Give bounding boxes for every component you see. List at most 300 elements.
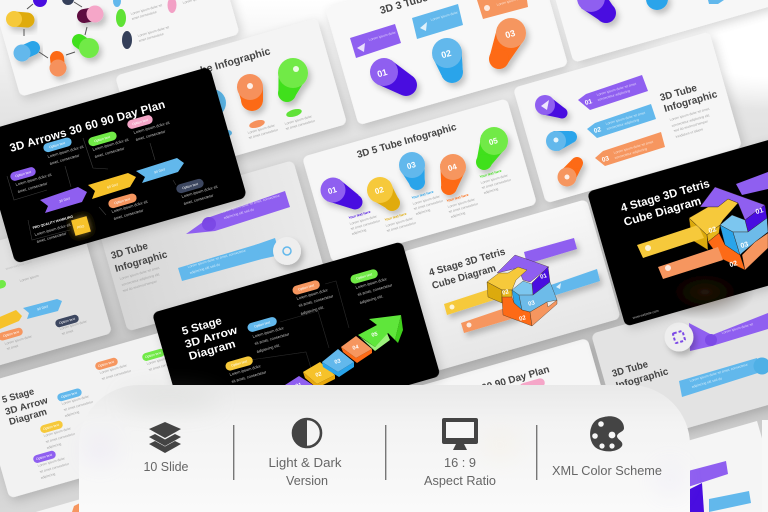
arrow: 90 day	[136, 158, 184, 183]
heading: 3D Tube	[110, 241, 150, 262]
tetris cube front	[689, 199, 768, 270]
tube: orange	[558, 157, 583, 186]
arrow: 60 day: 60 DAY	[107, 182, 119, 190]
captions: adipiscing	[483, 187, 499, 195]
slide text lines: Lorem ipsum dolor	[252, 325, 285, 339]
heading: 3D Tube	[611, 359, 650, 380]
pill text: amet, consectetur	[183, 192, 215, 206]
captions: Your text here	[384, 212, 407, 222]
banner 02: 02	[593, 126, 602, 135]
arrow 05	[358, 315, 403, 351]
tube: orange	[50, 58, 66, 76]
small icon: blue	[113, 0, 121, 7]
banner: purple: adipiscing elit sed do	[223, 207, 255, 220]
arrow: 30 day: 30 DAY	[59, 196, 71, 204]
bar: purple	[688, 461, 728, 487]
heading: 3D Arrow	[184, 324, 239, 351]
heading: 4 Stage 3D Tetris	[620, 178, 711, 215]
slide: bottom right cube fragment	[565, 421, 768, 512]
pill text: Lorem ipsum dolor sit	[133, 120, 171, 135]
captions: Your text here	[479, 169, 502, 179]
slide text lines: Lorem ipsum dolor	[247, 123, 276, 135]
small icon: pink	[168, 0, 176, 13]
connector lines	[250, 281, 349, 378]
pill text: Lorem ipsum dolor sit	[111, 199, 149, 214]
captions: Lorem ipsum dolor	[385, 216, 414, 228]
pill text: Lorem ipsum dolor sit	[92, 137, 130, 152]
banner: blue fragment	[708, 0, 724, 4]
slide text lines	[130, 0, 211, 43]
cube labels: 02	[502, 289, 510, 297]
slide text lines: amet consectetur	[131, 10, 158, 21]
pill text: amet, consectetur	[135, 128, 167, 142]
slide: cycle tubes	[0, 0, 240, 97]
slide text lines: adipiscing	[46, 442, 62, 450]
connector lines	[7, 138, 176, 240]
slide: 30 60 90 day plan light	[395, 338, 615, 489]
banner 02: Lorem ipsum dolor sit amet	[605, 111, 646, 126]
cube labels: 03	[740, 241, 749, 250]
slide text lines: adipiscing elit.	[359, 293, 384, 305]
pill: green	[349, 268, 379, 285]
heading: Cube Diagram	[623, 195, 703, 229]
arrow block 04: 04	[352, 344, 360, 352]
tube: yellow	[6, 11, 27, 27]
tube: blue	[198, 89, 226, 117]
glowing cube: PRO	[77, 224, 85, 230]
pill: orange: Option text	[3, 330, 19, 338]
bar: purple	[736, 172, 768, 195]
heading: Infographic	[114, 249, 169, 275]
banner 03	[595, 132, 665, 166]
slide text lines: Lorem ipsum dolor	[355, 276, 388, 290]
slide text lines: adipiscing elit.	[256, 342, 281, 354]
tube 03	[489, 18, 526, 69]
feature panel	[79, 385, 690, 512]
tube: dark	[62, 0, 74, 5]
bar: purple	[524, 238, 577, 264]
callout box: PRO QUALITY HANDLING	[32, 214, 74, 230]
pill: pink	[518, 377, 546, 393]
slide text lines: Lorem ipsum dolor sit	[137, 25, 169, 38]
banner 02	[587, 104, 656, 138]
pill: slate	[175, 178, 205, 194]
icon: layers	[149, 422, 181, 453]
pill: purple	[32, 450, 57, 464]
pill: orange: Option text	[298, 283, 315, 292]
pill: yellow: Option text	[231, 359, 248, 368]
tube 01	[370, 58, 417, 96]
tube: blue	[14, 44, 33, 62]
feature: aspect ratio	[424, 418, 496, 488]
bar: yellow	[637, 225, 704, 258]
slide text lines: Lorem ipsum dolor sit	[130, 3, 162, 16]
body text: Lorem ipsum dolor sit amet,	[119, 266, 161, 281]
captions	[348, 169, 512, 236]
icon: palette	[590, 416, 624, 451]
label: XML Color Scheme	[552, 464, 662, 478]
body text: consectetur adipiscing elit,	[671, 113, 711, 128]
pill text: Lorem ipsum dolor sit	[15, 172, 53, 187]
pill: green: Option text	[145, 351, 161, 359]
pill: purple	[9, 166, 37, 182]
arrow block 01: 01	[295, 382, 302, 390]
cube labels: 01	[755, 207, 764, 216]
heading: 5 Stage	[1, 386, 36, 406]
small icon: dark	[122, 31, 132, 49]
banner 01: consectetur adipiscing	[597, 89, 631, 102]
label: Light & Dark	[268, 456, 342, 470]
banner: blue: Lorem ipsum dolor sit amet, consectetur	[689, 362, 749, 383]
slide text lines: amet consectetur	[138, 32, 165, 43]
heading: 3D Tube	[659, 83, 699, 104]
captions: Lorem ipsum dolor	[349, 214, 378, 226]
slide: 3D tube infographic, three banners	[513, 32, 742, 203]
tube 01: 01	[327, 185, 338, 196]
banner 03: Lorem ipsum dolor sit amet	[613, 140, 654, 155]
callout box	[32, 214, 74, 244]
arrow: blue	[23, 299, 62, 319]
heading: Diagram	[8, 407, 48, 428]
pill: green: Option text	[356, 272, 373, 281]
captions: adipiscing	[415, 208, 431, 216]
slide: 3D tube infographic, gray	[95, 160, 326, 331]
pill: green: Option text	[94, 135, 111, 143]
banner: blue: Lorem ipsum dolor sit amet, consectetur	[187, 248, 247, 269]
banner: purple	[689, 313, 768, 351]
cube labels	[502, 273, 548, 323]
cube labels: 02	[729, 260, 738, 269]
arrow block 02: 02	[315, 371, 322, 379]
bar: orange	[658, 247, 723, 279]
banner: blue: Lorem ipsum dolor	[430, 10, 459, 22]
pill: yellow: Option text	[43, 423, 59, 431]
pill text: Lorem ipsum dolor sit	[181, 184, 219, 199]
body text: sed do eiusmod tempor	[122, 279, 158, 293]
arrow: yellow	[0, 310, 22, 331]
icon: green handshake	[285, 107, 303, 119]
tetris cube back	[689, 187, 765, 250]
label: 16 : 9	[444, 456, 476, 470]
callout box: amet, consectetur	[36, 230, 68, 244]
slide text lines	[247, 114, 316, 140]
captions: Your text here	[348, 210, 371, 220]
slide: 3D 5 tube infographic	[302, 98, 537, 263]
slide: 3D tube infographic, large card	[115, 18, 347, 182]
slide text lines: sit amet consectetur	[45, 432, 76, 444]
heading: 5 Stage	[181, 315, 223, 338]
tube 03: 03	[406, 160, 417, 171]
slide: bottom left fragment	[36, 470, 194, 512]
heading: Diagram	[188, 338, 237, 363]
footer text: www.website.com	[632, 309, 659, 320]
callout box: Lorem ipsum dolor sit	[34, 222, 72, 237]
arrow block 04	[341, 336, 372, 363]
pill text: Lorem ipsum dolor sit	[47, 144, 85, 159]
slide text lines: sit amet consectetur	[285, 119, 316, 131]
heading: 3D Arrows 30 60 90 Day Plan	[9, 99, 167, 155]
tube 05	[476, 127, 508, 170]
tube 03	[399, 152, 425, 190]
slide text lines: sit amet	[61, 329, 74, 336]
slide text lines: sit amet, consectetur	[298, 293, 334, 308]
slide text lines: sit amet, consectetur	[357, 282, 393, 297]
slide text lines	[229, 276, 393, 384]
pill text: amet, consectetur	[113, 207, 145, 221]
heading: 3D Arrow	[4, 395, 50, 418]
feature: slides	[144, 422, 189, 474]
heading	[110, 241, 169, 275]
divider	[536, 425, 537, 480]
tube 01: 01	[376, 67, 388, 79]
tube 03: 03	[504, 28, 516, 40]
captions: Your text here	[411, 190, 434, 200]
body text	[669, 107, 711, 139]
slide text lines: Lorem ipsum dolor	[59, 319, 88, 331]
bar: blue	[548, 269, 600, 296]
tube: pink	[84, 6, 104, 22]
arrow block 03	[322, 349, 354, 377]
tube 02	[367, 177, 400, 211]
pill: blue: Option text	[61, 391, 77, 399]
pill: orange	[291, 279, 321, 296]
pill: slate: Option text	[182, 182, 199, 190]
slide text lines: sit amet consectetur	[63, 400, 94, 412]
slide text lines: Lorem ipsum dolor	[43, 426, 72, 438]
footer text: www.website.com	[5, 260, 32, 271]
panel colour haze	[86, 388, 682, 496]
tube: green	[79, 38, 99, 58]
banner: blue	[679, 358, 768, 397]
pill: pink	[126, 114, 154, 130]
pill text: amet, consectetur	[49, 152, 81, 166]
captions: adipiscing	[351, 228, 367, 236]
pill: purple: Option text	[15, 170, 32, 178]
tube 02: 02	[440, 48, 452, 60]
tetris cube	[487, 255, 557, 326]
slide text lines: sit amet	[6, 344, 19, 351]
tube: blue	[546, 131, 577, 151]
banner: blue: adipiscing elit sed do	[691, 376, 723, 389]
body text: sed do eiusmod tempor	[673, 119, 709, 133]
captions: sit amet consectetur	[350, 219, 381, 231]
banner 02: consectetur adipiscing	[606, 118, 640, 131]
cube side	[688, 483, 704, 512]
slide text lines: adipiscing elit.	[300, 304, 325, 316]
tube 02: 02	[374, 185, 385, 196]
divider	[233, 425, 234, 480]
slide text lines: sit amet, consectetur	[231, 369, 267, 384]
pill: orange	[94, 357, 119, 371]
icon: half circle	[293, 419, 321, 447]
banner 01: 01	[584, 98, 593, 107]
arrow block 01	[285, 376, 313, 392]
banner: purple: Lorem ipsum dolor sit	[721, 322, 753, 335]
slide: 3D 3 tube infographic	[325, 0, 568, 125]
slide text lines: sit amet, consectetur	[254, 331, 290, 346]
tube 05: 05	[488, 136, 499, 147]
arrow: 30 day	[40, 187, 87, 213]
tube: blue	[646, 0, 668, 10]
slide text lines: Lorem ipsum dolor	[37, 456, 66, 468]
pill: orange fragment	[72, 503, 87, 512]
pill: pink: Option text	[132, 118, 149, 126]
slide text lines: Lorem ipsum dolor	[146, 354, 175, 366]
captions: Your text here	[446, 193, 469, 203]
slide text lines	[4, 274, 88, 351]
cube labels: 02	[519, 315, 527, 323]
heading: be Infographic	[199, 45, 272, 77]
banner: orange	[477, 0, 528, 19]
slide text lines: Lorem ipsum dolor	[61, 394, 90, 406]
arrow: blue: 90 DAY	[37, 304, 49, 312]
tube 02	[432, 38, 463, 83]
slide text lines: Lorem ipsum dolor	[296, 287, 329, 301]
captions: sit amet consectetur	[386, 221, 417, 233]
tube: purple	[535, 95, 568, 118]
small icon: green	[116, 9, 126, 27]
slide text lines: sit amet consectetur	[39, 462, 70, 474]
slide text lines	[37, 354, 179, 480]
pill: dark: Option text	[59, 317, 75, 325]
tube 04	[440, 154, 466, 195]
label: Version	[286, 474, 328, 488]
body text: incididunt ut labore	[675, 127, 704, 139]
body text	[119, 266, 161, 293]
heading: 3D Arrows 30 60 90 Day Plan	[417, 364, 551, 412]
slide: 4 stage 3D tetris dark	[587, 109, 768, 327]
orange glow	[655, 264, 755, 320]
tube 04: 04	[447, 162, 458, 173]
cube labels: 03	[528, 300, 536, 308]
captions: sit amet consectetur	[481, 178, 512, 190]
banner: purple: Lorem ipsum dolor	[368, 30, 397, 42]
banner 01: Lorem ipsum dolor sit amet	[596, 82, 637, 97]
slide text lines: Lorem ipsum dolor	[99, 363, 128, 375]
pill: green	[141, 348, 166, 362]
pill text: amet, consectetur	[17, 180, 49, 194]
feature: light and dark	[268, 419, 342, 488]
captions: sit amet consectetur	[413, 199, 444, 211]
heading: Infographic	[663, 89, 719, 115]
feature: xml color scheme	[552, 416, 662, 478]
pill text: amet, consectetur	[94, 145, 126, 159]
slide text lines: adipiscing	[64, 410, 80, 418]
slide text lines: sit amet consectetur	[248, 128, 279, 140]
bar: orange	[461, 305, 518, 333]
icon circle	[664, 322, 694, 352]
banner 03: consectetur adipiscing	[614, 147, 648, 160]
slide text lines: Lorem ipsum dolor	[229, 363, 262, 377]
glowing cube	[71, 216, 91, 236]
tube: green	[278, 58, 308, 102]
banner: blue	[412, 4, 463, 39]
heading	[181, 315, 239, 363]
pill: orange	[0, 327, 24, 341]
cube labels: 02	[708, 226, 717, 235]
slide text lines: Lorem ipsum	[19, 274, 39, 283]
body text: Lorem ipsum dolor sit amet,	[669, 107, 711, 122]
banner: blue	[178, 238, 280, 281]
captions: sit amet consectetur	[448, 202, 479, 214]
pill: orange	[107, 193, 138, 209]
captions: Lorem ipsum dolor	[447, 197, 476, 209]
divider	[385, 425, 386, 480]
pill: blue	[246, 316, 278, 333]
tube: purple	[33, 0, 47, 7]
banner: blue: adipiscing elit sed do	[189, 262, 221, 275]
heading: Infographic	[615, 366, 670, 392]
slide: top right tubes	[550, 0, 768, 63]
label: 10 Slide	[144, 460, 189, 474]
pill: blue	[56, 388, 83, 402]
slide text lines: adipiscing	[40, 472, 56, 480]
pill: blue: Option text	[49, 141, 66, 149]
pill: orange: Option text	[98, 360, 114, 368]
slide: 3D tube lower right	[591, 279, 768, 446]
slide: 5 stage 3D arrow dark	[152, 241, 441, 448]
pill: blue: Option text	[254, 320, 271, 329]
arrow 05: 05	[371, 331, 378, 339]
pill: purple: Option text	[36, 453, 52, 461]
pill: dark	[54, 314, 80, 328]
label: Aspect Ratio	[424, 474, 496, 488]
slide: 3D arrows light	[0, 218, 112, 396]
slide: 5 stage 3D arrow light	[0, 322, 231, 498]
tube: purple	[577, 0, 616, 23]
captions: Lorem ipsum dolor	[412, 194, 441, 206]
heading: Cube Diagram	[431, 263, 497, 292]
arrow: 90 day: 90 DAY	[154, 167, 166, 175]
arrow block 02	[303, 362, 335, 388]
bar: yellow	[444, 287, 500, 315]
tube: orange	[237, 74, 263, 111]
banner: purple: Lorem ipsum dolor sit amet, consectetur	[221, 193, 281, 214]
arrow block 03: 03	[334, 358, 341, 366]
pill: green	[87, 131, 118, 147]
slide text lines: Lorem ipsum dolor	[284, 114, 313, 126]
pill: yellow	[39, 420, 64, 434]
pill text	[15, 120, 219, 221]
pill: orange: Option text	[114, 197, 131, 205]
cube labels: 01	[540, 273, 548, 281]
heading: 4 Stage 3D Tetris	[428, 246, 507, 279]
pill: green	[0, 279, 7, 291]
slide text lines: Lorem ipsum dolor	[4, 334, 33, 346]
heading: 3D 5 Tube Infographic	[356, 122, 458, 161]
bar: blue	[709, 491, 751, 512]
slide: 4 stage 3D tetris light	[402, 199, 621, 371]
tube 01	[320, 178, 362, 210]
icon circle	[273, 237, 301, 265]
banner: purple	[186, 191, 290, 234]
pill: yellow	[224, 355, 254, 372]
slide: 3D arrows 30 60 90 day plan dark	[0, 67, 247, 271]
slide text lines: sit amet consectetur	[101, 369, 132, 381]
banner 03: 03	[601, 155, 610, 164]
icon: monitor	[442, 418, 478, 450]
slide text lines: sit amet consectetur	[148, 360, 179, 372]
captions: Lorem ipsum dolor	[480, 173, 509, 185]
cycle arrows	[24, 2, 87, 58]
banner 01	[578, 75, 648, 110]
icon: blue fragment	[224, 130, 232, 136]
pill: blue	[42, 137, 73, 153]
arrow: 60 day	[88, 173, 136, 199]
heading	[1, 386, 50, 428]
icon: orange handshake	[248, 118, 266, 130]
captions: adipiscing	[450, 211, 466, 219]
